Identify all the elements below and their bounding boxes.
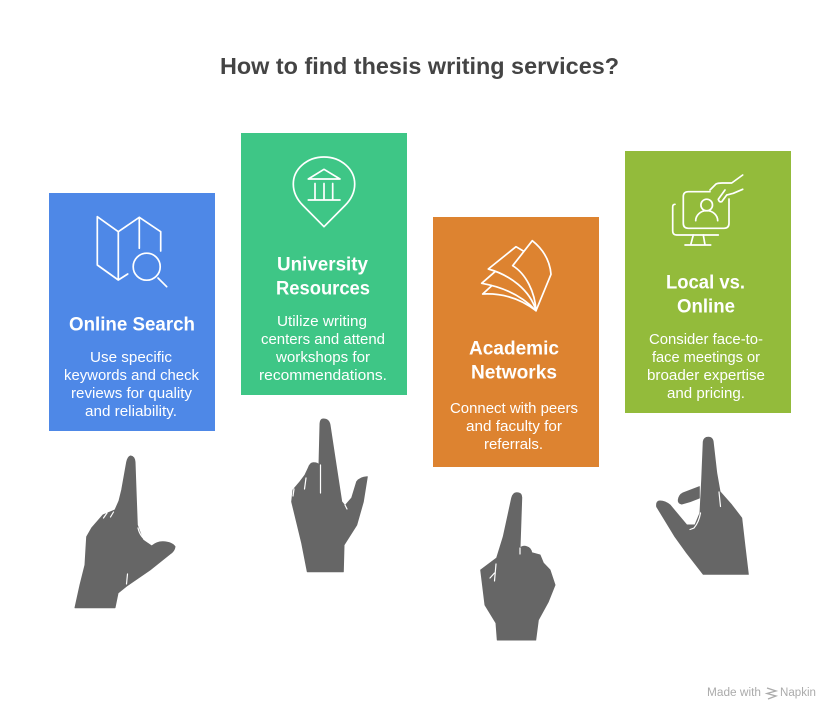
text: online search description: Use specific [90,350,172,366]
text: online search description: keywords and check [64,368,200,384]
heading: online search: Online Search [69,314,195,336]
heading: academic networks: Academic [469,338,559,360]
text: university description: workshops for [275,350,370,366]
text: online search description: and reliability. [85,404,177,420]
heading: university resources: University [277,254,368,276]
text: local description [647,332,765,402]
text: academic description: Connect with peers [450,401,578,417]
icon: hand 1 [75,456,175,608]
text: academic description: referrals. [484,437,543,453]
footer: made with napkin [707,687,816,699]
text: online search description: reviews for quality [71,386,193,402]
text: local description: and pricing. [667,386,745,402]
footer: made with napkin: Made with [707,687,761,699]
panel: local vs online: Online [677,296,735,318]
panel: university resources: Resources [276,278,370,300]
title: How to find thesis writing services? [220,53,619,79]
icon: hand 4 [657,437,748,574]
icon: pin with institution [293,157,355,227]
text: academic description [450,401,578,453]
text: online search description [64,350,200,420]
footer: made with napkin: Napkin [780,687,816,699]
text: academic description: and faculty for [466,419,562,435]
icon: open book pages [482,241,551,311]
text: local description: broader expertise [647,368,765,384]
icon: monitor with hand [673,175,743,245]
text: local description: face meetings or [652,350,760,366]
text: university description: Utilize writing [277,314,367,330]
text: university description: recommendations. [259,368,387,384]
text: university description: centers and attend [261,332,385,348]
text: university description [259,314,387,384]
panel: online search [49,193,215,431]
icon: hand 3 [481,493,555,640]
icon: hand 2 [292,419,367,572]
icon: map with magnifier [97,217,167,287]
text: local description: Consider face-to- [649,332,763,348]
panel: academic networks: Networks [471,362,557,384]
panel: university resources [241,133,407,395]
panel: academic networks [433,217,599,467]
panel: local vs online [625,151,791,413]
icon: napkin logo [767,688,776,699]
heading: local vs online: Local vs. [666,272,745,294]
